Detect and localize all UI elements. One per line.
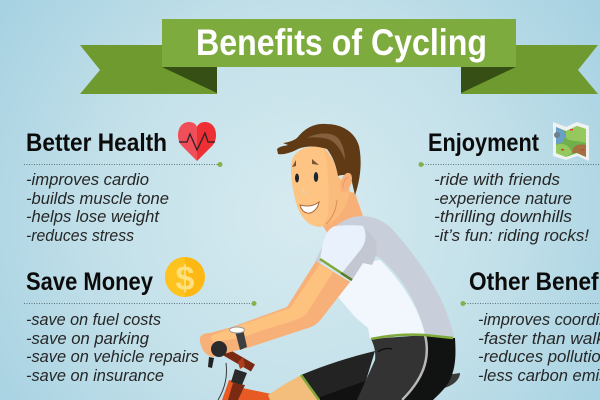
panel: better health bbox=[24, 122, 222, 245]
eyes bbox=[295, 174, 299, 182]
ear bbox=[340, 173, 352, 193]
list: better health: -reduces stress bbox=[26, 226, 134, 245]
panel: save money bbox=[24, 257, 256, 385]
smile bbox=[300, 202, 319, 213]
icon: map bbox=[553, 122, 589, 161]
nose bbox=[303, 185, 306, 193]
list: better health: -builds muscle tone bbox=[26, 189, 169, 208]
arm bbox=[200, 261, 350, 357]
icon: heart with pulse bbox=[178, 122, 216, 161]
eyebrows bbox=[292, 160, 296, 167]
jaw line bbox=[326, 200, 337, 224]
list: better health bbox=[26, 170, 169, 245]
list: better health: -improves cardio bbox=[26, 170, 149, 189]
illustration: cyclist bbox=[200, 124, 460, 400]
wristwatch bbox=[230, 327, 247, 350]
shirt bbox=[315, 216, 454, 339]
list: enjoyment: -experience nature bbox=[434, 189, 572, 208]
heading: save money: Save Money bbox=[26, 268, 153, 296]
list: save money: -save on vehicle repairs bbox=[26, 347, 199, 366]
list: enjoyment bbox=[434, 170, 589, 245]
list: enjoyment: -thrilling downhills bbox=[434, 207, 573, 226]
title: Benefits of Cycling bbox=[196, 22, 487, 63]
panel: enjoyment bbox=[418, 122, 600, 245]
list: save money bbox=[26, 310, 199, 385]
cheek highlight bbox=[291, 147, 329, 227]
panel: other benefits bbox=[460, 268, 600, 385]
neck bbox=[322, 190, 364, 236]
hair highlight bbox=[307, 134, 345, 160]
list: save money: -save on parking bbox=[26, 329, 150, 348]
hair bbox=[277, 124, 361, 195]
list: enjoyment: -ride with friends bbox=[434, 170, 560, 189]
handlebar grip bbox=[211, 341, 227, 357]
head bbox=[277, 124, 361, 227]
saddle bbox=[436, 373, 460, 388]
shorts bbox=[357, 335, 455, 400]
title banner bbox=[80, 19, 598, 94]
face bbox=[291, 147, 350, 227]
icon: dollar coin: $ bbox=[176, 260, 195, 298]
list: save money: -save on insurance bbox=[26, 366, 164, 385]
icon: dollar coin bbox=[165, 257, 205, 298]
bicycle bbox=[208, 350, 300, 400]
heading: better health: Better Health bbox=[26, 129, 167, 157]
list: save money: -save on fuel costs bbox=[26, 310, 161, 329]
list: other benefits bbox=[478, 310, 600, 385]
list: enjoyment: -it’s fun: riding rocks! bbox=[434, 226, 589, 245]
leg bbox=[268, 351, 375, 400]
list: better health: -helps lose weight bbox=[26, 207, 160, 226]
heading: enjoyment: Enjoyment bbox=[428, 129, 540, 157]
